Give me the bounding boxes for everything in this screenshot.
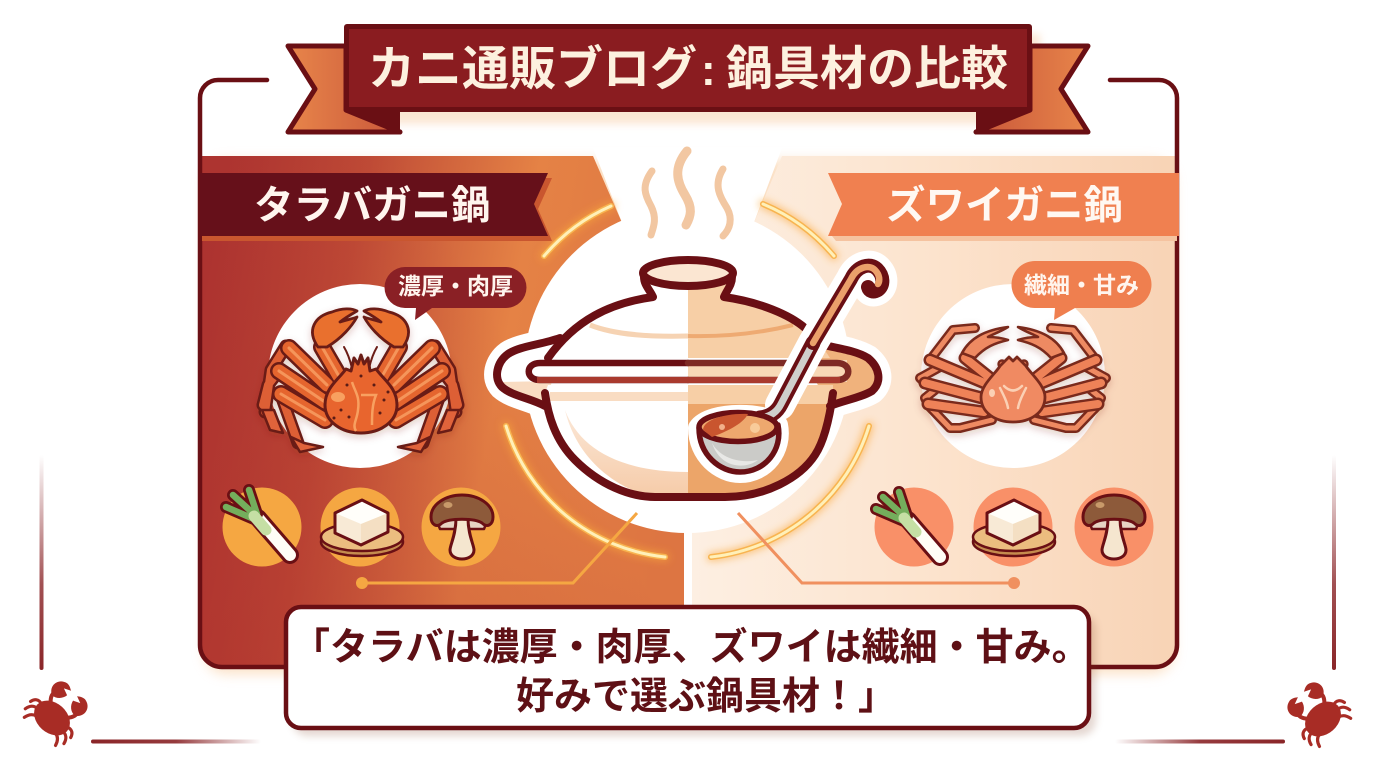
decoration: right corner line vertical [1332,455,1336,670]
bubble label left: 濃厚・肉厚 [398,273,513,299]
icon: mushroom left [431,495,493,559]
ingredients right [874,488,1154,566]
icon: king crab [262,309,459,452]
ingredients left [222,488,500,566]
icon: leek right [876,492,940,557]
heading: タラバガニ鍋: タラバガニ鍋 [254,184,491,228]
ribbon: ズワイガニ鍋 [828,173,1179,241]
panel: タラバガニ background [200,156,684,667]
crab circle left [268,284,452,468]
center white circle [524,207,850,533]
glowing arcs [506,204,869,557]
icon: ladle [698,266,882,473]
title text: : [701,46,716,95]
center gap between panels [593,148,782,668]
title text: カニ通販ブログ [368,42,697,95]
connector: right [738,513,1020,589]
icon: small crab right [1279,674,1355,750]
panel: ズワイガニ background [692,156,1177,667]
icon: snow crab [920,327,1106,428]
quote text line 1: 「タラバは濃厚・肉厚、ズワイは繊細・甘み。 [292,626,1090,669]
icon: mushroom right [1083,495,1145,559]
decoration: left corner line horizontal [91,740,261,744]
title text: 鍋具材の比較 [726,42,1008,95]
connector: left [356,513,637,589]
bubble label right: 繊細・甘み [1024,272,1139,298]
title ribbon [288,24,1088,134]
bubble: 繊細・甘み [1012,261,1152,320]
outer frame line [200,80,1177,667]
icon: clay pot [497,260,878,497]
steam [645,151,730,236]
heading: ズワイガニ鍋: ズワイガニ鍋 [886,184,1123,228]
icon: tofu right [973,500,1055,556]
decoration: right corner line horizontal [1115,740,1285,744]
icon: leek left [226,490,290,555]
crab circle right [921,284,1105,468]
icon: small crab left [20,673,96,749]
frame glow [204,160,1174,674]
icon: tofu left [321,500,403,556]
quote box [286,607,1096,736]
ribbon: タラバガニ鍋 [200,173,552,241]
quote text line 2: 好みで選ぶ鍋具材！」 [516,676,896,718]
decoration: left corner line vertical [40,455,44,670]
bubble: 濃厚・肉厚 [385,267,526,320]
